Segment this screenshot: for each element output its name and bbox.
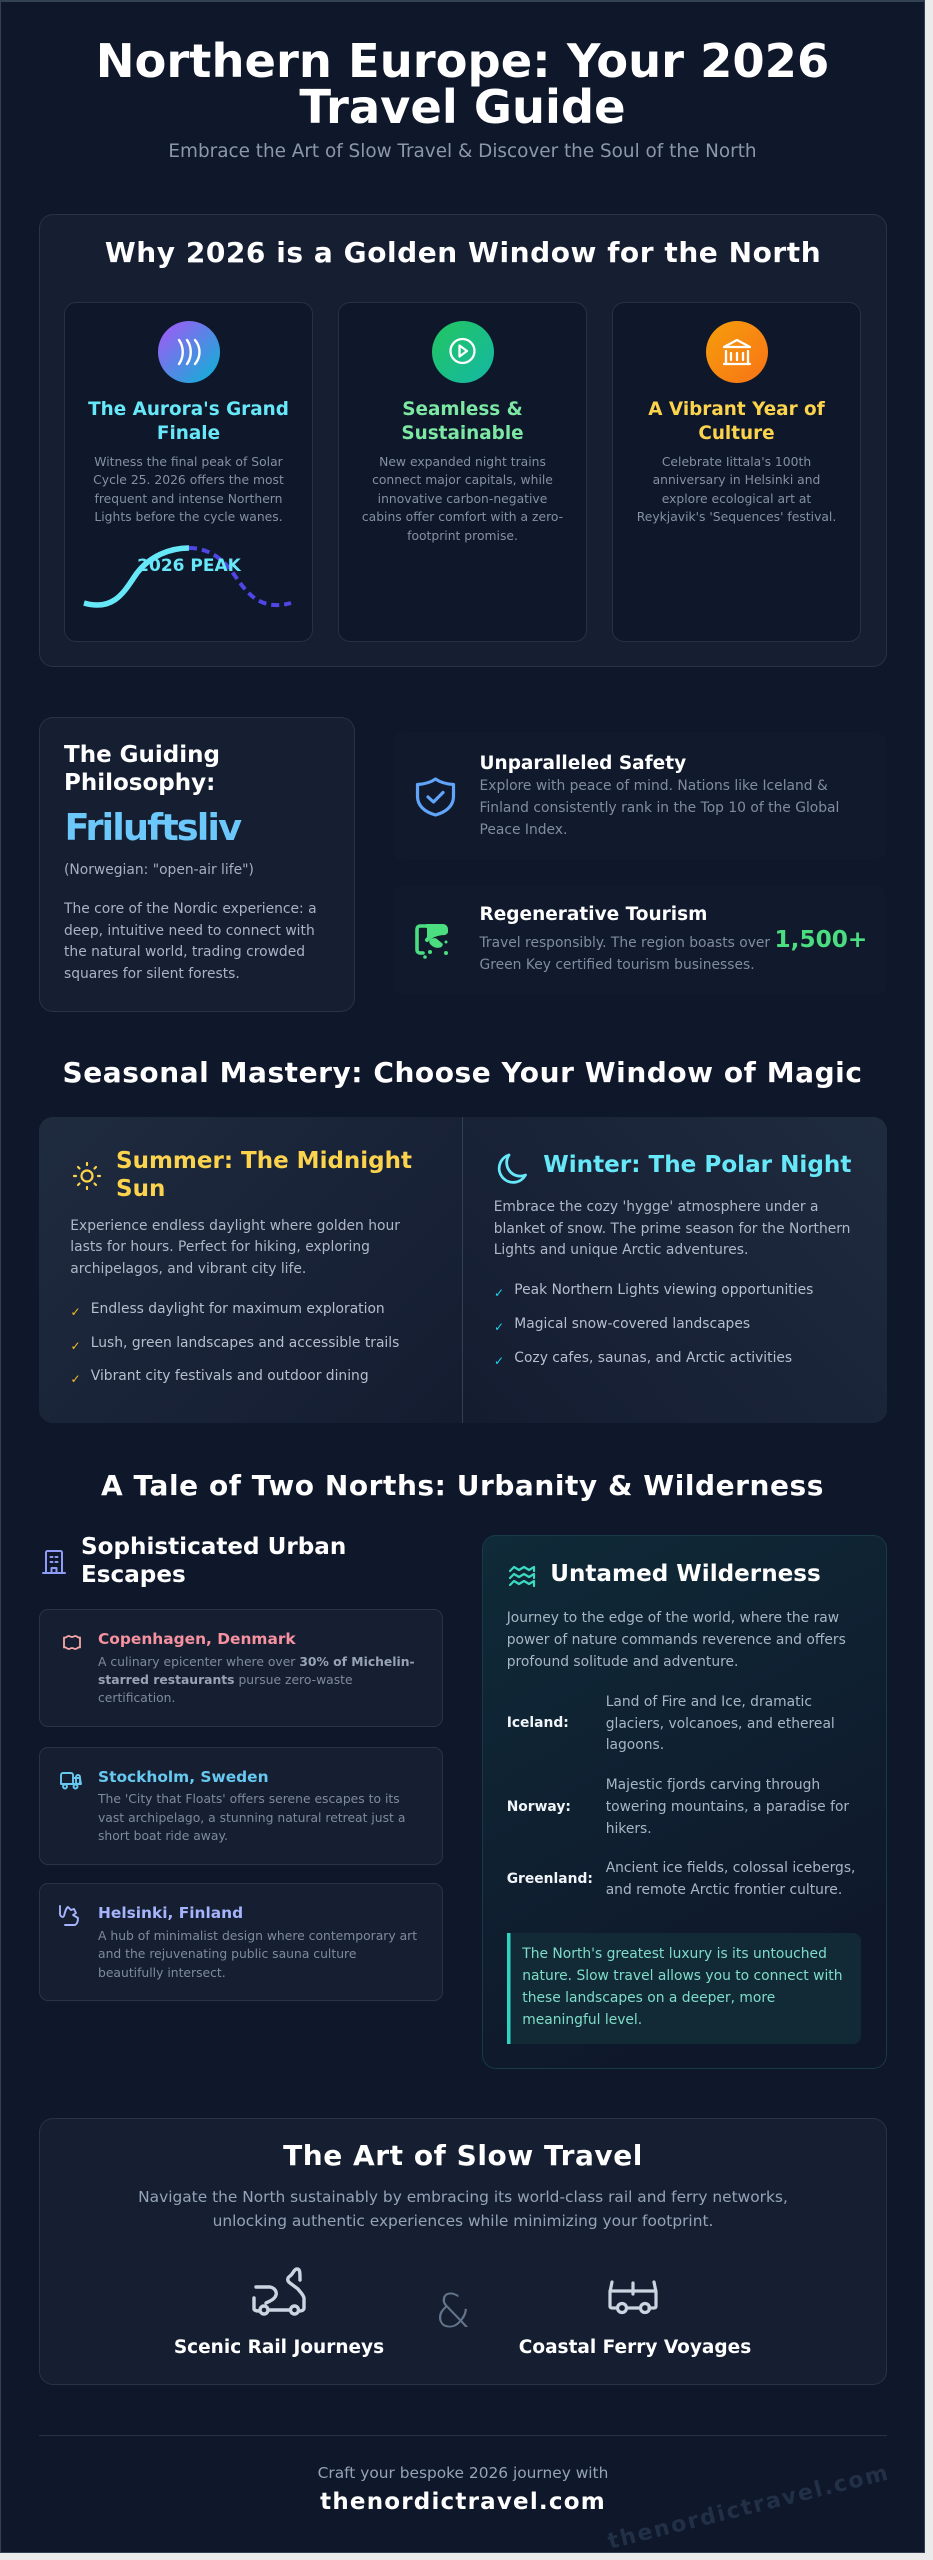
chart: solar cycle curve: 2026 PEAK [137, 556, 242, 576]
icon: ferry [608, 2280, 658, 2314]
text: safety: Explore with peace of mind. Nations like Iceland & [480, 778, 828, 794]
text: summer: Experience endless daylight where golden hour [70, 1218, 400, 1234]
list: winter highlights: ✓ [494, 1286, 504, 1300]
text: summer [70, 1218, 400, 1277]
text: slow travel: Navigate the North sustainably by embracing its world-class rail and ferry networks, [138, 2188, 788, 2206]
icon: aurora waves [158, 321, 220, 383]
card: regenerative tourism [393, 886, 886, 995]
callout: slow travel luxury: these landscapes on a deeper, more [522, 1990, 775, 2006]
title: Northern Europe: Your 2026 [96, 34, 829, 88]
text: seamless: innovative carbon-negative [378, 492, 547, 506]
list: winter highlights: ✓ [494, 1320, 504, 1334]
panel: urban escapes [39, 1534, 443, 2001]
heading: seamless: Seamless & [402, 399, 523, 420]
text: seamless: connect major capitals, while [372, 473, 553, 487]
callout: slow travel luxury: The North's greatest luxury is its untouched [522, 1946, 827, 1962]
list: summer highlights: ✓ [70, 1372, 81, 1386]
row: iceland: Iceland: [507, 1715, 569, 1731]
heading: culture [648, 399, 825, 444]
heading: culture: Culture [698, 423, 775, 444]
row: norway: Norway: [507, 1799, 571, 1815]
text: safety: Peace Index. [480, 822, 567, 838]
list: winter highlights: Cozy cafes, saunas, and Arctic activities [514, 1350, 792, 1366]
text: copenhagen: starred restaurants pursue zero-waste [98, 1673, 353, 1687]
text: regenerative with stat: Travel responsibly. The region boasts over 1,500+ [480, 926, 867, 953]
heading: aurora finale: Finale [157, 423, 220, 444]
row: norway: Majestic fjords carving through [606, 1777, 820, 1793]
callout: slow travel luxury: meaningful level. [522, 2012, 642, 2028]
list: summer highlights: Vibrant city festivals and outdoor dining [91, 1368, 369, 1384]
row: norway: hikers. [606, 1821, 652, 1837]
icon: building [42, 1550, 66, 1574]
text: summer: archipelagos, and vibrant city life. [70, 1261, 306, 1277]
text: safety: Finland consistently rank in the Top 10 of the Global [480, 800, 839, 816]
text: copenhagen [98, 1654, 415, 1705]
text: aurora: Cycle 25. 2026 offers the most [93, 473, 284, 487]
icon: play circle [432, 321, 494, 383]
text: philosophy: the natural world, trading crowded [64, 944, 305, 960]
heading: summer: Sun [116, 1176, 165, 1202]
list: summer highlights: Lush, green landscapes and accessible trails [91, 1335, 399, 1351]
heading: copenhagen: Copenhagen, Denmark [98, 1630, 296, 1648]
text: winter: Lights and unique Arctic adventures. [494, 1242, 748, 1258]
text: copenhagen: A culinary epicenter where over 30% of Michelin- [98, 1654, 415, 1668]
text: stockholm: vast archipelago, a stunning natural retreat just a [98, 1811, 405, 1825]
text: philosophy: The core of the Nordic experience: a [64, 901, 317, 917]
text: culture: Celebrate Iittala's 100th [662, 455, 811, 469]
text: aurora: Lights before the cycle wanes. [94, 510, 283, 524]
text: winter: Embrace the cozy 'hygge' atmosphere under a [494, 1199, 818, 1215]
heading: seamless [401, 399, 524, 444]
watermark: thenordictravel.com [605, 2460, 892, 2553]
heading: guiding philosophy [64, 742, 220, 796]
text: seamless: New expanded night trains [379, 455, 546, 469]
row: iceland: Land of Fire and Ice, dramatic [606, 1694, 812, 1710]
heading: helsinki: Helsinki, Finland [98, 1904, 243, 1922]
heading: aurora finale: The Aurora's Grand [88, 399, 289, 420]
text: wilderness: power of nature commands reverence and offers [507, 1632, 846, 1648]
text: wilderness: profound solitude and adventure. [507, 1654, 738, 1670]
text: footer call to action: Craft your bespoke 2026 journey with [318, 2464, 608, 2482]
heading: tale of two norths: A Tale of Two Norths: Urbanity & Wilderness [101, 1469, 824, 1502]
heading: guiding philosophy: The Guiding [64, 742, 220, 768]
card: culture [612, 302, 861, 642]
text: culture: anniversary in Helsinki and [653, 473, 820, 487]
text: wilderness [506, 1610, 846, 1670]
list: winter highlights: Magical snow-covered landscapes [514, 1316, 750, 1332]
panel: art of slow travel [39, 2118, 887, 2385]
row: iceland: lagoons. [606, 1737, 664, 1753]
list: summer highlights [70, 1301, 399, 1386]
panel: winter [463, 1117, 887, 1423]
label: rail: Scenic Rail Journeys [174, 2337, 384, 2358]
list: summer highlights: ✓ [70, 1339, 81, 1353]
callout: slow travel luxury: nature. Slow travel allows you to connect with [522, 1968, 843, 1984]
text: culture [637, 455, 836, 524]
text: philosophy [64, 901, 317, 982]
icon: stockholm ferry [60, 1772, 82, 1790]
text: culture: Reykjavik's 'Sequences' festival. [637, 510, 836, 524]
row: norway: towering mountains, a paradise for [606, 1799, 849, 1815]
subtitle: Embrace the Art of Slow Travel & Discover the Soul of the North [168, 141, 757, 162]
icon: green recycle [415, 924, 448, 959]
text: copenhagen: certification. [98, 1691, 175, 1705]
text: regenerative with stat: Green Key certified tourism businesses. [480, 957, 755, 973]
text: philosophy: deep, intuitive need to connect with [64, 923, 315, 939]
text: safety [480, 778, 839, 838]
row: greenland: Greenland: [507, 1871, 593, 1887]
text: stockholm [98, 1792, 405, 1843]
row: norway [507, 1777, 850, 1837]
text: aurora: frequent and intense Northern [94, 492, 282, 506]
panel: untamed wilderness [482, 1535, 887, 2069]
heading: winter: Winter: The Polar Night [543, 1152, 851, 1178]
title [96, 34, 829, 134]
text: seamless [362, 455, 563, 543]
card: copenhagen [39, 1609, 443, 1727]
icon: shield [416, 777, 456, 817]
heading: wilderness: Untamed Wilderness [550, 1561, 821, 1587]
text: aurora [93, 455, 284, 524]
text: helsinki: and the rejuvenating public sauna culture [98, 1947, 356, 1961]
list: winter highlights [494, 1282, 813, 1368]
list: winter highlights: ✓ [494, 1354, 504, 1368]
text: philosophy: squares for silent forests. [64, 966, 240, 982]
title: Travel Guide [299, 80, 626, 134]
heading: aurora finale [88, 399, 289, 444]
card: safety [393, 732, 886, 860]
glyph: ampersand: & [435, 2284, 471, 2338]
heading: stockholm: Stockholm, Sweden [98, 1768, 269, 1786]
heading: summer: Summer: The Midnight [116, 1148, 412, 1174]
icon: sun [72, 1162, 102, 1190]
text: regenerative with stat [479, 926, 867, 973]
note: translation: (Norwegian: "open-air life") [64, 862, 254, 878]
heading: culture: A Vibrant Year of [648, 399, 825, 420]
text: slow travel [138, 2188, 788, 2230]
row: greenland: Ancient ice fields, colossal icebergs, [606, 1860, 855, 1876]
heading: guiding philosophy: Philosophy: [64, 770, 215, 796]
text: helsinki [98, 1929, 417, 1980]
heading: safety: Unparalleled Safety [480, 753, 686, 774]
footer [39, 2435, 887, 2536]
text: culture: explore ecological art at [662, 492, 811, 506]
heading: slow travel: The Art of Slow Travel [283, 2139, 643, 2172]
text: helsinki: A hub of minimalist design where contemporary art [98, 1929, 417, 1943]
text: stockholm: The 'City that Floats' offers serene escapes to its [98, 1792, 400, 1806]
row: iceland: glaciers, volcanoes, and ethereal [606, 1716, 835, 1732]
icon: helsinki [59, 1905, 79, 1926]
card: stockholm [39, 1747, 443, 1865]
text: winter: blanket of snow. The prime season for the Northern [494, 1221, 850, 1237]
chart: solar cycle curve [83, 545, 292, 608]
text: helsinki: beautifully intersect. [98, 1966, 226, 1980]
list: winter highlights: Peak Northern Lights viewing opportunities [514, 1282, 813, 1298]
icon: moon [498, 1154, 527, 1184]
panel: summer [39, 1117, 462, 1423]
text: winter [494, 1199, 850, 1258]
heading: regenerative: Regenerative Tourism [480, 904, 707, 925]
heading: urban escapes [81, 1534, 346, 1588]
icon: copenhagen [63, 1635, 81, 1650]
panel: why 2026 [39, 214, 887, 667]
heading: golden window: Why 2026 is a Golden Window for the North [105, 236, 821, 269]
list: summer highlights: ✓ [70, 1305, 81, 1319]
callout: slow travel luxury [507, 1933, 861, 2044]
row: greenland: and remote Arctic frontier culture. [606, 1882, 842, 1898]
heading: summer [116, 1148, 412, 1202]
text: wilderness: Journey to the edge of the world, where the raw [507, 1610, 839, 1626]
icon: waves [508, 1566, 536, 1588]
text: aurora: Witness the final peak of Solar [94, 455, 283, 469]
heading: urban escapes: Sophisticated Urban [81, 1534, 346, 1560]
text: summer: lasts for hours. Perfect for hiking, exploring [70, 1239, 370, 1255]
card: aurora [64, 302, 313, 642]
highlight: friluftsliv: Friluftsliv [64, 806, 240, 849]
label: ferry: Coastal Ferry Voyages [519, 2337, 751, 2358]
text: slow travel: unlocking authentic experiences while minimizing your footprint. [213, 2212, 713, 2230]
panel: seasons [39, 1117, 887, 1423]
card: helsinki [39, 1883, 443, 2001]
list: summer highlights: Endless daylight for maximum exploration [91, 1301, 385, 1317]
panel: guiding philosophy [39, 717, 355, 1012]
icon: museum [706, 321, 768, 383]
text: seamless: footprint promise. [407, 529, 518, 543]
row: iceland [507, 1694, 835, 1753]
text: stockholm: short boat ride away. [98, 1829, 228, 1843]
text: website: thenordictravel.com [320, 2489, 606, 2515]
icon: rail [252, 2267, 306, 2316]
card: sustainable [338, 302, 587, 642]
heading: seamless: Sustainable [401, 423, 524, 444]
row: greenland [507, 1860, 855, 1898]
heading: seasonal mastery: Seasonal Mastery: Choose Your Window of Magic [63, 1056, 862, 1089]
text: seamless: cabins offer comfort with a zero- [362, 510, 563, 524]
heading: urban escapes: Escapes [81, 1562, 186, 1588]
